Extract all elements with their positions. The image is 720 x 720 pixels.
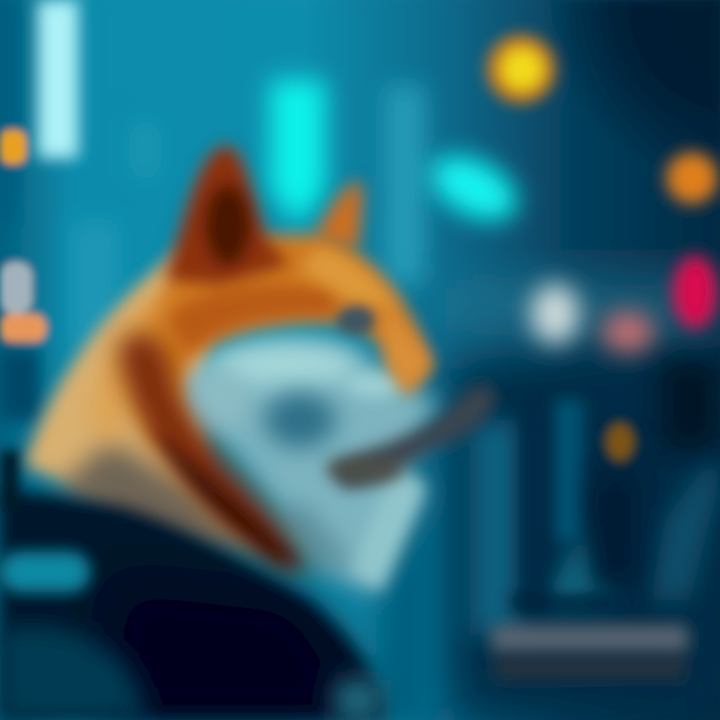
light: crimson [673, 256, 717, 328]
fox: eye [336, 305, 376, 335]
fox: dark fur stripe [118, 333, 310, 575]
fox: white muzzle and chest [175, 341, 440, 595]
light: white [531, 284, 579, 344]
left edge lights [0, 0, 78, 420]
light: pink [602, 312, 654, 352]
table: dark teal panels [470, 360, 720, 635]
fox [25, 145, 495, 595]
fox: paw raised [330, 386, 495, 490]
fox: snout tip [385, 305, 432, 395]
light: dim amber [605, 422, 635, 462]
light: orange left [0, 130, 26, 164]
neon bar: cyan centre [270, 80, 325, 225]
jacket: dark navy [0, 450, 385, 720]
dark band left [0, 350, 40, 420]
light: grey left [0, 262, 32, 314]
light: orange right [667, 153, 717, 203]
jacket: teal highlight [0, 552, 90, 592]
light: peach left [0, 314, 46, 342]
neon bar: pale cyan [38, 0, 78, 158]
blurred caption [492, 595, 688, 679]
fox: chest cream [25, 245, 270, 550]
fox: left ear [165, 145, 290, 285]
fox: head and neck fur [120, 235, 432, 470]
foreground: lower teal sleeve [335, 680, 380, 720]
neon ellipse: cyan right [421, 143, 527, 233]
fox: right ear [315, 180, 362, 250]
light: yellow [487, 35, 555, 103]
